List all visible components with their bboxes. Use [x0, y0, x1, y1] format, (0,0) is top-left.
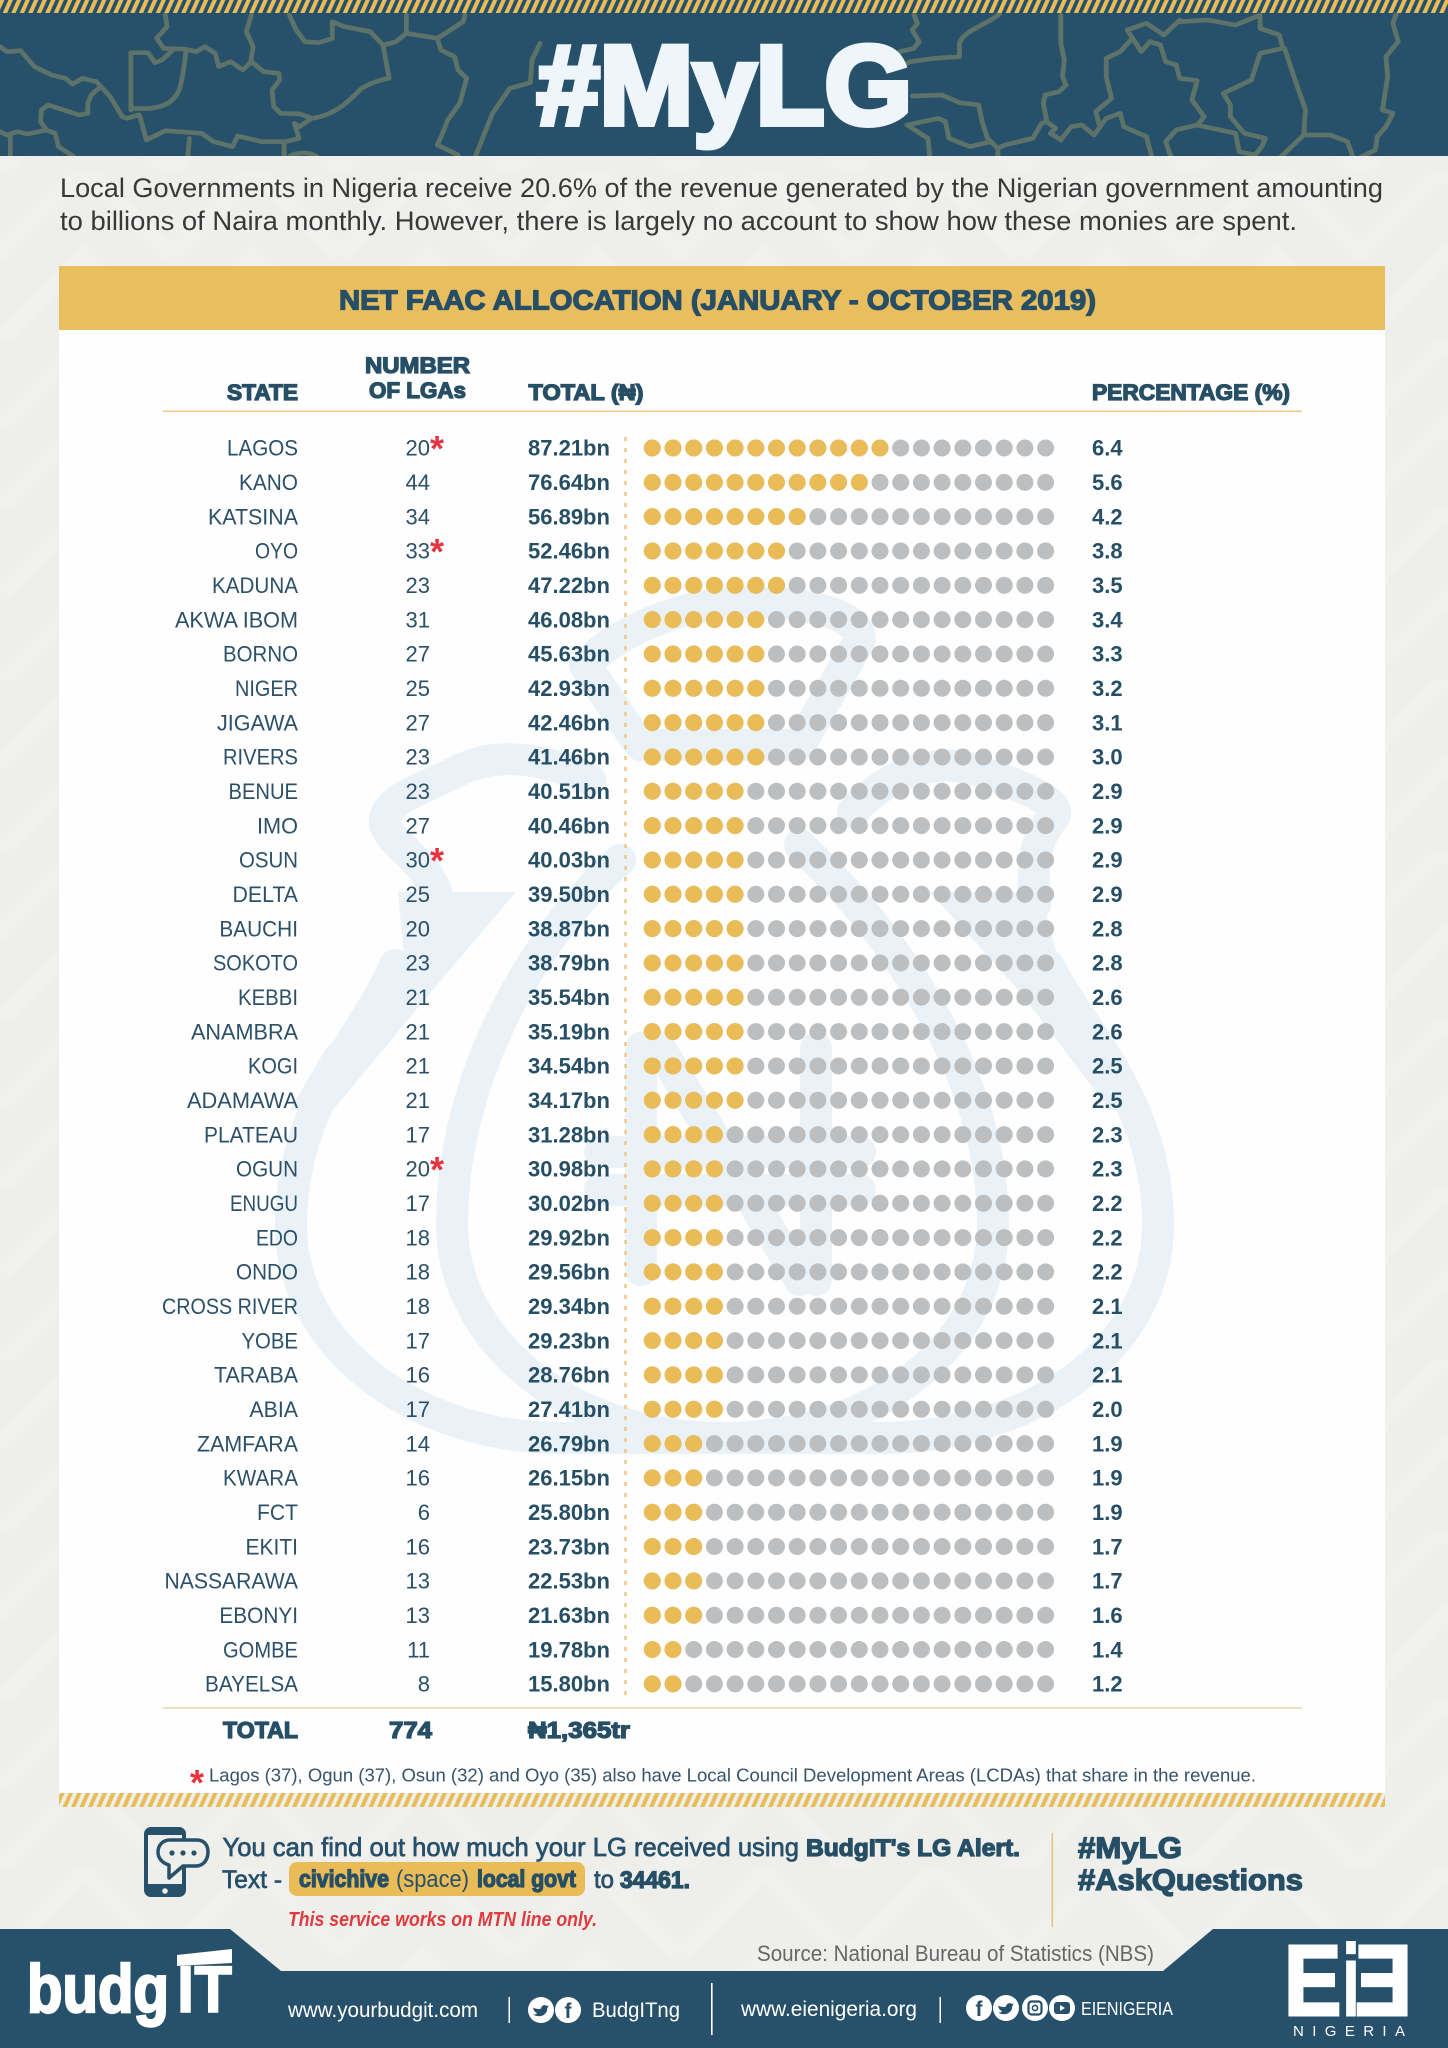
row: Benue	[228, 779, 1123, 804]
row: Abia	[249, 1397, 1123, 1422]
row: Ebonyi: 21.63bn	[528, 1603, 610, 1628]
row: Imo: 40.46bn	[528, 813, 610, 838]
logo: EiE Nigeria: E	[1355, 1925, 1412, 2036]
row: Akwa Ibom	[175, 607, 1123, 632]
row: Anambra: 2.6	[1092, 1019, 1123, 1044]
row: Delta: 25	[406, 882, 430, 907]
row: Jigawa: 3.1	[1092, 710, 1123, 735]
row: Rivers	[223, 745, 1123, 770]
row: Bauchi: 2.8	[1092, 916, 1123, 941]
row: Kwara	[223, 1466, 1123, 1491]
row: Sokoto	[213, 951, 1123, 976]
row: Gombe: 11	[407, 1637, 430, 1662]
icons: twitter, facebook: f	[564, 2000, 572, 2023]
row: Ekiti: 1.7	[1092, 1534, 1123, 1559]
row: Enugu: 2.2	[1092, 1191, 1123, 1216]
row: Zamfara: 26.79bn	[528, 1431, 610, 1456]
footer links BudgIT: EIENIGERIA	[1081, 1998, 1174, 2019]
column headers: STATE	[227, 380, 298, 405]
row: Oyo: 33	[406, 539, 430, 564]
row: Taraba	[214, 1363, 1123, 1388]
row: Adamawa: 34.17bn	[528, 1088, 610, 1113]
row: Jigawa	[217, 710, 1123, 735]
row: Imo	[257, 813, 1123, 838]
row: Zamfara: 1.9	[1092, 1431, 1123, 1456]
heading band: NET FAAC ALLOCATION (JANUARY - OCTOBER 2019)	[339, 284, 1096, 316]
row: Jigawa: 42.46bn	[528, 710, 610, 735]
pill: SMS format: (space)	[396, 1866, 469, 1893]
LG alert text: BudgIT's LG Alert.	[806, 1835, 1020, 1862]
row: Kogi: KOGI	[248, 1054, 298, 1079]
row: Benue: 23	[406, 779, 430, 804]
row: Ogun: 2.3	[1092, 1157, 1123, 1182]
row: Kwara: KWARA	[223, 1466, 298, 1491]
column headers: TOTAL (₦)	[528, 380, 644, 405]
row: Rivers: 41.46bn	[528, 745, 610, 770]
logo: BudgIT: budg	[27, 1951, 169, 2027]
row: Kogi: 34.54bn	[528, 1054, 610, 1079]
row: Rivers: 23	[406, 745, 430, 770]
row: Ondo: ONDO	[236, 1260, 298, 1285]
footer links BudgIT: BudgITng	[592, 1999, 680, 2022]
row: Kwara: 26.15bn	[528, 1466, 610, 1491]
row: Edo: 29.92bn	[528, 1225, 610, 1250]
row: Ondo: 29.56bn	[528, 1260, 610, 1285]
row: Katsina: KATSINA	[208, 504, 298, 529]
logo: EiE Nigeria: E	[1284, 1925, 1341, 2036]
row: Anambra: ANAMBRA	[191, 1019, 298, 1044]
row: Yobe: 17	[406, 1328, 430, 1353]
row: Gombe: 19.78bn	[528, 1637, 610, 1662]
row: Ebonyi	[219, 1603, 1123, 1628]
row: Ekiti: EKITI	[246, 1534, 298, 1559]
row: Zamfara: 14	[406, 1431, 430, 1456]
logo: EiE Nigeria: i	[1343, 1925, 1359, 2037]
row: Gombe: GOMBE	[223, 1637, 298, 1662]
row: FCT: 6	[418, 1500, 430, 1525]
row: Bauchi: BAUCHI	[219, 916, 298, 941]
row: Bayelsa	[205, 1672, 1123, 1697]
row: Bayelsa: BAYELSA	[205, 1672, 298, 1697]
row: Taraba: 16	[406, 1363, 430, 1388]
row: Ebonyi: 1.6	[1092, 1603, 1123, 1628]
pill: SMS format	[289, 1862, 585, 1896]
logo: BudgIT: IT	[177, 1952, 232, 2026]
row: Plateau: 2.3	[1092, 1122, 1123, 1147]
header banner	[0, 0, 1448, 157]
row: Ogun	[236, 1149, 1123, 1190]
row: Abia: 17	[406, 1397, 430, 1422]
row: Oyo	[255, 531, 1123, 572]
row: Katsina	[208, 504, 1123, 529]
row: Kano	[239, 470, 1123, 495]
row: Bayelsa: 15.80bn	[528, 1672, 610, 1697]
row: Abia: ABIA	[249, 1397, 298, 1422]
watermark: money bag	[290, 602, 1158, 1438]
row: Kogi	[248, 1054, 1123, 1079]
row: Abia: 2.0	[1092, 1397, 1123, 1422]
row: Osun: 2.9	[1092, 848, 1123, 873]
pill: SMS format: local govt	[477, 1866, 576, 1893]
row: Taraba: 2.1	[1092, 1363, 1123, 1388]
row: Niger	[235, 676, 1123, 701]
row: Ekiti	[246, 1534, 1123, 1559]
row: Ogun: 30.98bn	[528, 1157, 610, 1182]
row: Kogi: 2.5	[1092, 1054, 1123, 1079]
row: Nassarawa: 22.53bn	[528, 1569, 610, 1594]
column headers	[227, 353, 1290, 405]
row: Zamfara: ZAMFARA	[197, 1431, 298, 1456]
row: Oyo: *	[430, 531, 444, 572]
row: Zamfara	[197, 1431, 1123, 1456]
row: Kebbi: 21	[406, 985, 430, 1010]
row: Oyo: OYO	[255, 539, 298, 564]
row: Ogun: *	[430, 1149, 444, 1190]
row: Jigawa: 27	[406, 710, 430, 735]
row: Bauchi	[219, 916, 1123, 941]
row: Kebbi	[238, 985, 1123, 1010]
row: Borno	[223, 642, 1123, 667]
row: Kebbi: 2.6	[1092, 985, 1123, 1010]
row: Cross River: 2.1	[1092, 1294, 1123, 1319]
row: Cross River: 29.34bn	[528, 1294, 610, 1319]
row: FCT	[257, 1500, 1123, 1525]
row: Niger: 25	[406, 676, 430, 701]
icons: twitter, facebook	[528, 1997, 581, 2023]
LG alert text: You can find out how much your LG received using	[222, 1832, 799, 1862]
LG alert text: Text -	[222, 1866, 282, 1894]
row: Edo: 18	[406, 1225, 430, 1250]
row: FCT: 25.80bn	[528, 1500, 610, 1525]
row: Kwara: 1.9	[1092, 1466, 1123, 1491]
row: Katsina: 34	[406, 504, 430, 529]
panel: allocation table	[59, 266, 1385, 1794]
intro text: to billions of Naira monthly. However, there is largely no account to show how these monies are spent.	[60, 206, 1297, 236]
hashtags: #MyLG	[1078, 1832, 1182, 1865]
row: Imo: 2.9	[1092, 813, 1123, 838]
row: Adamawa: 21	[406, 1088, 430, 1113]
footer links BudgIT: www.eienigeria.org	[740, 1998, 917, 2021]
row: Oyo: 52.46bn	[528, 539, 610, 564]
icon: phone with chat bubble	[146, 1829, 208, 1896]
total row: 774	[389, 1717, 432, 1743]
total row: TOTAL	[223, 1717, 298, 1743]
row: Kaduna	[212, 573, 1123, 598]
row: Ondo	[236, 1260, 1123, 1285]
row: Ekiti: 16	[406, 1534, 430, 1559]
row: Benue: 2.9	[1092, 779, 1123, 804]
footnote: *	[190, 1762, 204, 1803]
row: Adamawa: ADAMAWA	[187, 1088, 298, 1113]
row: Akwa Ibom: 3.4	[1092, 607, 1123, 632]
row: Gombe: 1.4	[1092, 1637, 1123, 1662]
row: Nassarawa: 1.7	[1092, 1569, 1123, 1594]
row: Kebbi: 35.54bn	[528, 985, 610, 1010]
row: Anambra: 35.19bn	[528, 1019, 610, 1044]
row: Imo: 27	[406, 813, 430, 838]
row: Katsina: 56.89bn	[528, 504, 610, 529]
row: Enugu: 30.02bn	[528, 1191, 610, 1216]
row: Sokoto: 2.8	[1092, 951, 1123, 976]
row: Edo: 2.2	[1092, 1225, 1123, 1250]
row: Niger: 3.2	[1092, 676, 1123, 701]
row: Bauchi: 20	[406, 916, 430, 941]
row: Ekiti: 23.73bn	[528, 1534, 610, 1559]
row: Yobe	[242, 1328, 1123, 1353]
footer links BudgIT: www.yourbudgit.com	[287, 1999, 478, 2022]
total row: ₦1,365tr	[528, 1717, 630, 1743]
row: Kwara: 16	[406, 1466, 430, 1491]
row: Borno: BORNO	[223, 642, 298, 667]
row: Kaduna: KADUNA	[212, 573, 298, 598]
row: Kano: 44	[406, 470, 430, 495]
intro text: Local Governments in Nigeria receive 20.6% of the revenue generated by the Nigerian government amounting	[60, 173, 1383, 203]
row: Cross River: 18	[406, 1294, 430, 1319]
LG alert text: to	[594, 1866, 614, 1894]
row: Benue: 40.51bn	[528, 779, 610, 804]
row: Nassarawa	[164, 1569, 1123, 1594]
heading band	[59, 266, 1385, 330]
row: Osun: OSUN	[239, 848, 298, 873]
row: Enugu: 17	[406, 1191, 430, 1216]
row: Delta: DELTA	[232, 882, 298, 907]
hashtags	[1078, 1832, 1303, 1897]
row: Rivers: 3.0	[1092, 745, 1123, 770]
row: Osun: *	[430, 840, 444, 881]
row: Akwa Ibom: AKWA IBOM	[175, 607, 298, 632]
row: Borno: 3.3	[1092, 642, 1123, 667]
row: Lagos: 87.21bn	[528, 436, 610, 461]
row: Kano: 5.6	[1092, 470, 1123, 495]
row: Abia: 27.41bn	[528, 1397, 610, 1422]
LG alert text	[222, 1832, 1020, 1896]
row: Enugu	[230, 1191, 1123, 1216]
row: Plateau: 31.28bn	[528, 1122, 610, 1147]
row: Cross River: CROSS RIVER	[162, 1294, 298, 1319]
row: Edo	[256, 1225, 1123, 1250]
row: Kaduna: 23	[406, 573, 430, 598]
source: Source: National Bureau of Statistics (NBS)	[757, 1941, 1154, 1966]
row: Bayelsa: 8	[418, 1672, 430, 1697]
row: Anambra	[191, 1019, 1123, 1044]
row: Adamawa	[187, 1088, 1123, 1113]
row: Yobe: YOBE	[242, 1328, 298, 1353]
row: Katsina: 4.2	[1092, 504, 1123, 529]
intro text	[60, 173, 1383, 236]
row: Ebonyi: EBONYI	[219, 1603, 298, 1628]
row: Bayelsa: 1.2	[1092, 1672, 1123, 1697]
row: Bauchi: 38.87bn	[528, 916, 610, 941]
row: Delta: 2.9	[1092, 882, 1123, 907]
row: Lagos: 20	[406, 436, 430, 461]
row: Ondo: 18	[406, 1260, 430, 1285]
total row	[223, 1717, 630, 1743]
row: Borno: 45.63bn	[528, 642, 610, 667]
row: Kebbi: KEBBI	[238, 985, 298, 1010]
row: Ebonyi: 13	[406, 1603, 430, 1628]
row: Nassarawa: 13	[406, 1569, 430, 1594]
MTN note: This service works on MTN line only.	[288, 1909, 597, 1931]
row: Osun: 30	[406, 848, 430, 873]
row: Niger: NIGER	[235, 676, 298, 701]
row: Lagos: LAGOS	[227, 436, 298, 461]
row: FCT: FCT	[257, 1500, 298, 1525]
row: Kano: KANO	[239, 470, 298, 495]
row: Delta: 39.50bn	[528, 882, 610, 907]
row: Taraba: TARABA	[214, 1363, 298, 1388]
row: Ogun: 20	[406, 1157, 430, 1182]
row: Borno: 27	[406, 642, 430, 667]
row: Akwa Ibom: 46.08bn	[528, 607, 610, 632]
row: Imo: IMO	[257, 813, 298, 838]
row: Kaduna: 47.22bn	[528, 573, 610, 598]
footnote: Lagos (37), Ogun (37), Osun (32) and Oyo (35) also have Local Council Development Areas (LCDAs) that share in the revenue.	[209, 1764, 1256, 1786]
row: Osun: 40.03bn	[528, 848, 610, 873]
row: Jigawa: JIGAWA	[217, 710, 298, 735]
LG alert text: 34461.	[620, 1867, 690, 1894]
row: Adamawa: 2.5	[1092, 1088, 1123, 1113]
title: #MyLG	[537, 23, 912, 148]
hashtags: #AskQuestions	[1078, 1864, 1303, 1897]
row: Kaduna: 3.5	[1092, 573, 1123, 598]
row: Benue: BENUE	[228, 779, 298, 804]
row: Osun	[239, 840, 1123, 881]
row: Yobe: 2.1	[1092, 1328, 1123, 1353]
pill: SMS format: civichive	[299, 1866, 389, 1893]
row: FCT: 1.9	[1092, 1500, 1123, 1525]
column headers: OF LGAs	[369, 378, 466, 403]
row: Ogun: OGUN	[236, 1157, 298, 1182]
row: Edo: EDO	[256, 1225, 298, 1250]
row: Lagos: *	[430, 428, 444, 469]
footnote	[190, 1762, 1256, 1803]
row: Anambra: 21	[406, 1019, 430, 1044]
row: Ondo: 2.2	[1092, 1260, 1123, 1285]
row: Delta	[232, 882, 1123, 907]
row: Cross River	[162, 1294, 1123, 1319]
row: Nassarawa: NASSARAWA	[164, 1569, 298, 1594]
row: Taraba: 28.76bn	[528, 1363, 610, 1388]
row: Plateau: PLATEAU	[204, 1122, 298, 1147]
row: Gombe	[223, 1637, 1123, 1662]
row: Sokoto: 23	[406, 951, 430, 976]
row: Sokoto: SOKOTO	[213, 951, 298, 976]
column headers: NUMBER	[365, 353, 470, 378]
row: Lagos: 6.4	[1092, 436, 1123, 461]
row: Kano: 76.64bn	[528, 470, 610, 495]
logo: EiE Nigeria	[1284, 1925, 1412, 2040]
row: Plateau	[204, 1122, 1123, 1147]
footer	[0, 1925, 1448, 2048]
logo: EiE Nigeria: NIGERIA	[1293, 2023, 1405, 2040]
row: Niger: 42.93bn	[528, 676, 610, 701]
column headers: PERCENTAGE (%)	[1092, 380, 1290, 405]
footer links BudgIT	[287, 1983, 1174, 2035]
row: Rivers: RIVERS	[223, 745, 298, 770]
row: Sokoto: 38.79bn	[528, 951, 610, 976]
row: Enugu: ENUGU	[230, 1191, 298, 1216]
row: Lagos	[227, 428, 1123, 469]
row: Akwa Ibom: 31	[406, 607, 430, 632]
icons: facebook, twitter, instagram, youtube: f	[976, 1998, 984, 2021]
row: Yobe: 29.23bn	[528, 1328, 610, 1353]
row: Kogi: 21	[406, 1054, 430, 1079]
icons: facebook, twitter, instagram, youtube	[966, 1995, 1075, 2021]
row: Oyo: 3.8	[1092, 539, 1123, 564]
row: Plateau: 17	[406, 1122, 430, 1147]
